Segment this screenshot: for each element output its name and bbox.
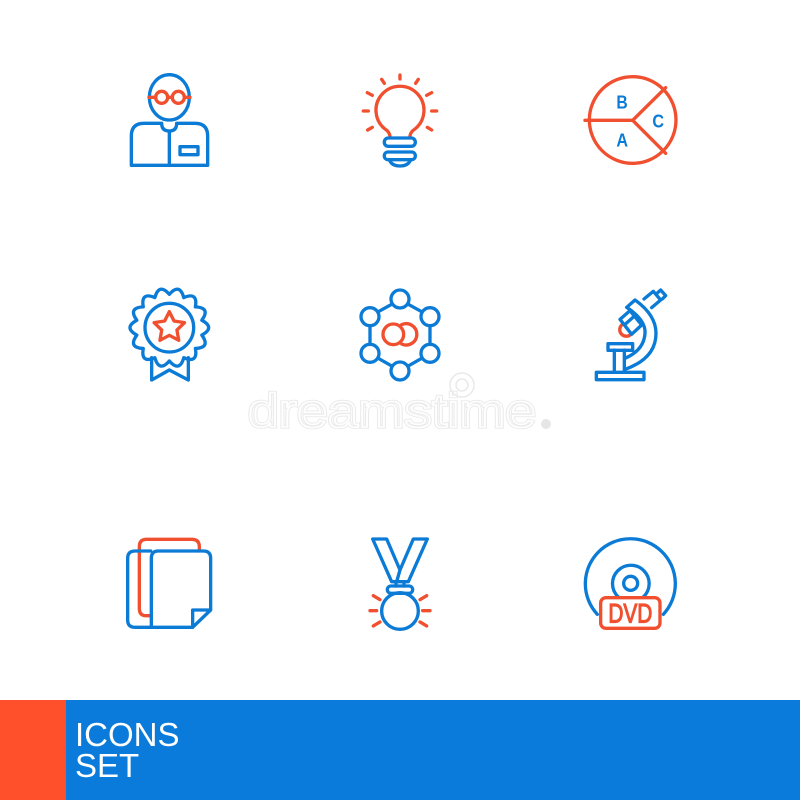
icon: pie chart A B C: C (652, 111, 664, 132)
icon: pie chart A B C (585, 77, 676, 163)
icon: pie chart A B C: A (616, 130, 628, 151)
icon: award badge with star (130, 289, 209, 380)
icon: scientist with glasses (131, 75, 208, 165)
icon: pie chart A B C: B (616, 91, 628, 112)
footer banner (0, 700, 800, 800)
icon: microscope (596, 290, 666, 380)
banner title: ICONS (75, 716, 180, 753)
watermark: dreamstime (248, 384, 536, 437)
icon: medal (370, 539, 430, 629)
icon: molecule (361, 290, 439, 380)
orange accent block (0, 700, 66, 800)
icon: DVD disc: DVD (608, 598, 652, 628)
watermark (248, 373, 551, 437)
watermark: dreamstime (248, 384, 536, 437)
banner title: SET (75, 747, 139, 784)
icon: light bulb (363, 75, 437, 166)
icon: documents (128, 539, 211, 627)
icon: DVD disc (585, 539, 675, 628)
